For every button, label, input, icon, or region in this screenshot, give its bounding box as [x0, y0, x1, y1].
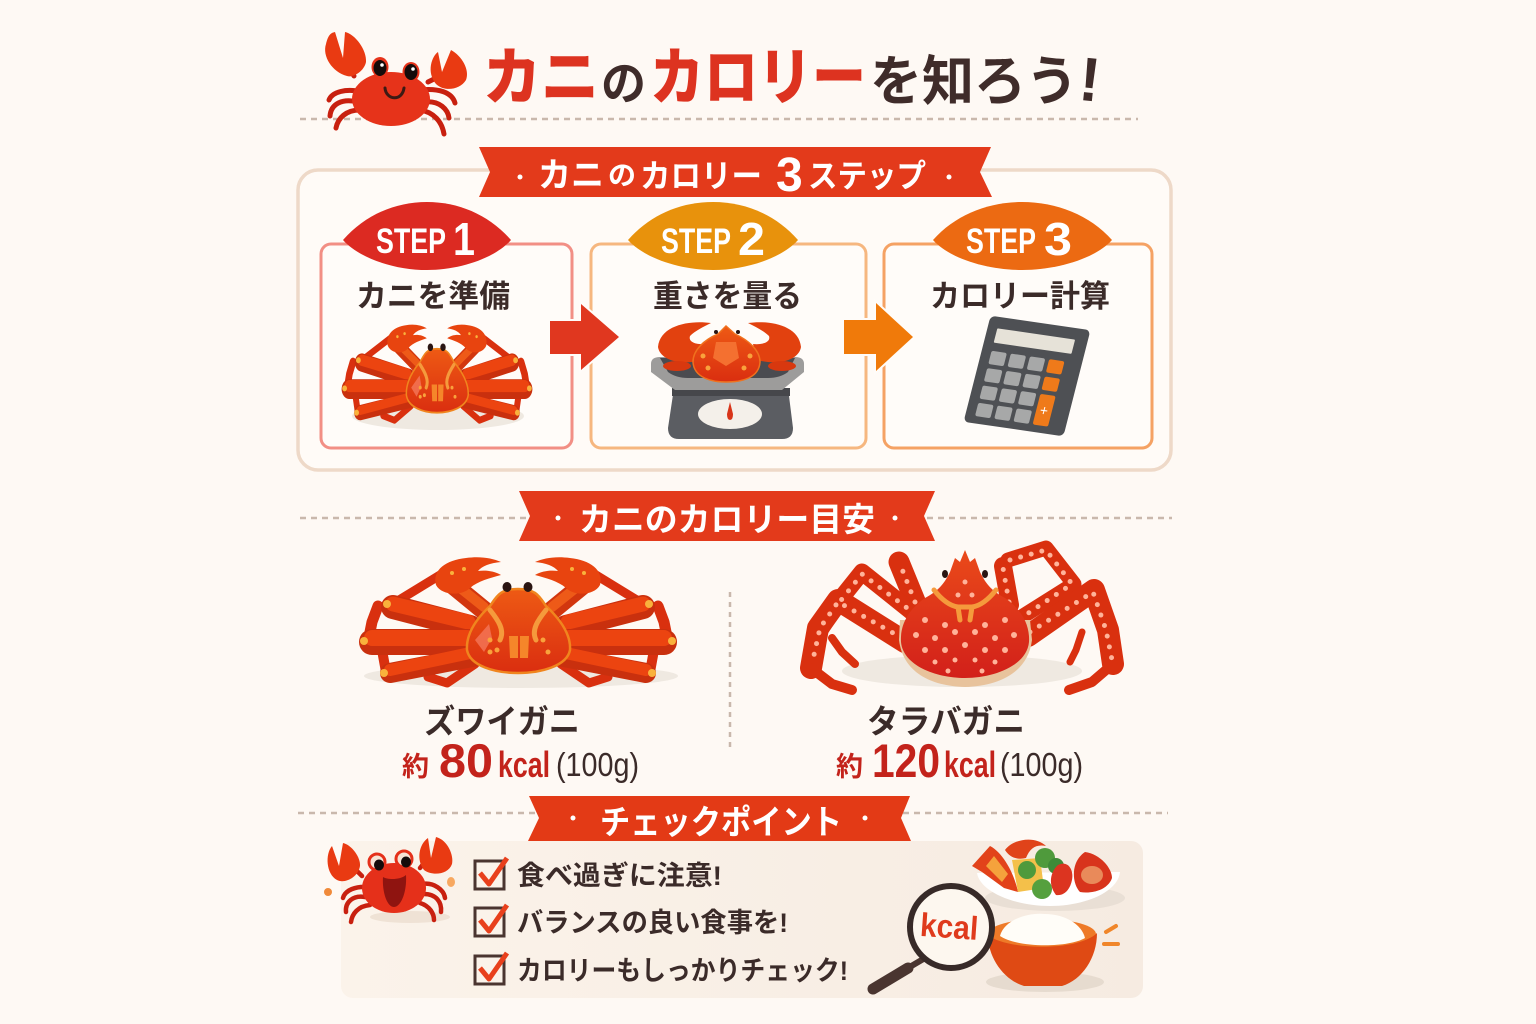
- step 3 badge: STEP: [966, 222, 1036, 261]
- title text: [483, 44, 1104, 116]
- banner: calorie guide heading: カニのカロリー目安: [579, 501, 875, 538]
- section: check points: [298, 796, 1168, 998]
- king crab name: タラバガニ: [867, 703, 1025, 740]
- step 2: [591, 202, 866, 448]
- icon: calculator: +: [1038, 403, 1050, 420]
- illustration: snow crab: [360, 557, 678, 688]
- step 3 badge: [933, 202, 1112, 270]
- section: calorie guide: [300, 491, 1172, 787]
- icon: magnifier with kcal: [873, 886, 992, 989]
- step 1 box: [321, 244, 572, 448]
- icon: calculator: [964, 316, 1090, 436]
- check item 3: カロリーもしっかりチェック!: [517, 956, 848, 986]
- check point panel background: [341, 841, 1143, 998]
- king crab calories: kcal: [944, 744, 996, 785]
- banner: 3 steps heading: ステップ: [808, 158, 926, 194]
- king crab calories: 約: [836, 752, 863, 782]
- king crab calories: (100g): [1000, 746, 1083, 783]
- banner: 3 steps heading: 3: [776, 149, 803, 202]
- snow crab calories: (100g): [556, 746, 639, 783]
- snow crab calories: kcal: [498, 744, 550, 785]
- step 1: [321, 202, 572, 448]
- step 2 label: 重さを量る: [653, 279, 802, 314]
- illustration: king crab: [811, 548, 1113, 690]
- king crab column: [811, 548, 1113, 787]
- section divider: [298, 812, 1168, 814]
- banner: 3 steps heading: カニ: [538, 157, 604, 195]
- step 1 badge: STEP: [376, 222, 446, 261]
- step 2 box: [591, 244, 866, 448]
- icon: crab on shadow: [342, 325, 532, 430]
- step 1 badge: [343, 202, 511, 270]
- king crab calories: 120: [872, 734, 940, 787]
- icon: cheering crab: [324, 837, 455, 923]
- banner: 3 steps heading: [479, 147, 992, 202]
- snow crab calories: [402, 734, 639, 787]
- step 3 label: カロリー計算: [930, 279, 1110, 314]
- title divider: [300, 118, 1138, 120]
- check item 2: バランスの良い食事を!: [517, 908, 788, 938]
- snow crab calories: 約: [402, 752, 429, 782]
- king crab calories: [836, 734, 1083, 787]
- arrow: step 1 to step 2: [550, 304, 619, 370]
- step 2 badge: 2: [738, 213, 765, 265]
- banner: check points heading: チェックポイント: [600, 804, 842, 842]
- header: crab mascot and title: [300, 32, 1138, 134]
- vertical divider: [729, 592, 731, 750]
- title text: の: [601, 57, 646, 110]
- banner: 3 steps heading: カロリー: [640, 158, 762, 194]
- icon: smiling crab mascot: [325, 32, 467, 134]
- panel frame: [298, 170, 1171, 470]
- checklist: [475, 858, 848, 986]
- banner: calorie guide heading: [519, 491, 935, 541]
- step 2 badge: [628, 202, 798, 270]
- step 3: [884, 202, 1152, 448]
- step 2 badge: STEP: [661, 222, 731, 261]
- snow crab calories: 80: [439, 734, 493, 787]
- snow crab column: [360, 557, 678, 787]
- panel: 3 steps: [298, 147, 1171, 470]
- title text: !: [1076, 45, 1104, 116]
- title text: を知ろう: [870, 52, 1078, 112]
- banner: 3 steps heading: の: [608, 161, 636, 191]
- banner: check points heading: [528, 796, 911, 842]
- icon: food plate: [972, 840, 1125, 911]
- step 3 badge: 3: [1044, 213, 1072, 265]
- arrow: step 2 to step 3: [844, 303, 913, 371]
- title text: カニ: [483, 44, 599, 113]
- snow crab name: ズワイガニ: [424, 703, 580, 740]
- section divider: [300, 517, 1172, 519]
- title text: カロリー: [650, 44, 866, 113]
- icon: magnifier with kcal: kcal: [919, 906, 979, 947]
- check item 1: 食べ過ぎに注意!: [517, 860, 722, 891]
- icon: rice bowl: [986, 914, 1118, 992]
- step 3 box: [884, 244, 1152, 448]
- step 1 label: カニを準備: [356, 279, 510, 314]
- step 1 badge: 1: [453, 213, 475, 265]
- icon: crab on kitchen scale: [651, 322, 804, 439]
